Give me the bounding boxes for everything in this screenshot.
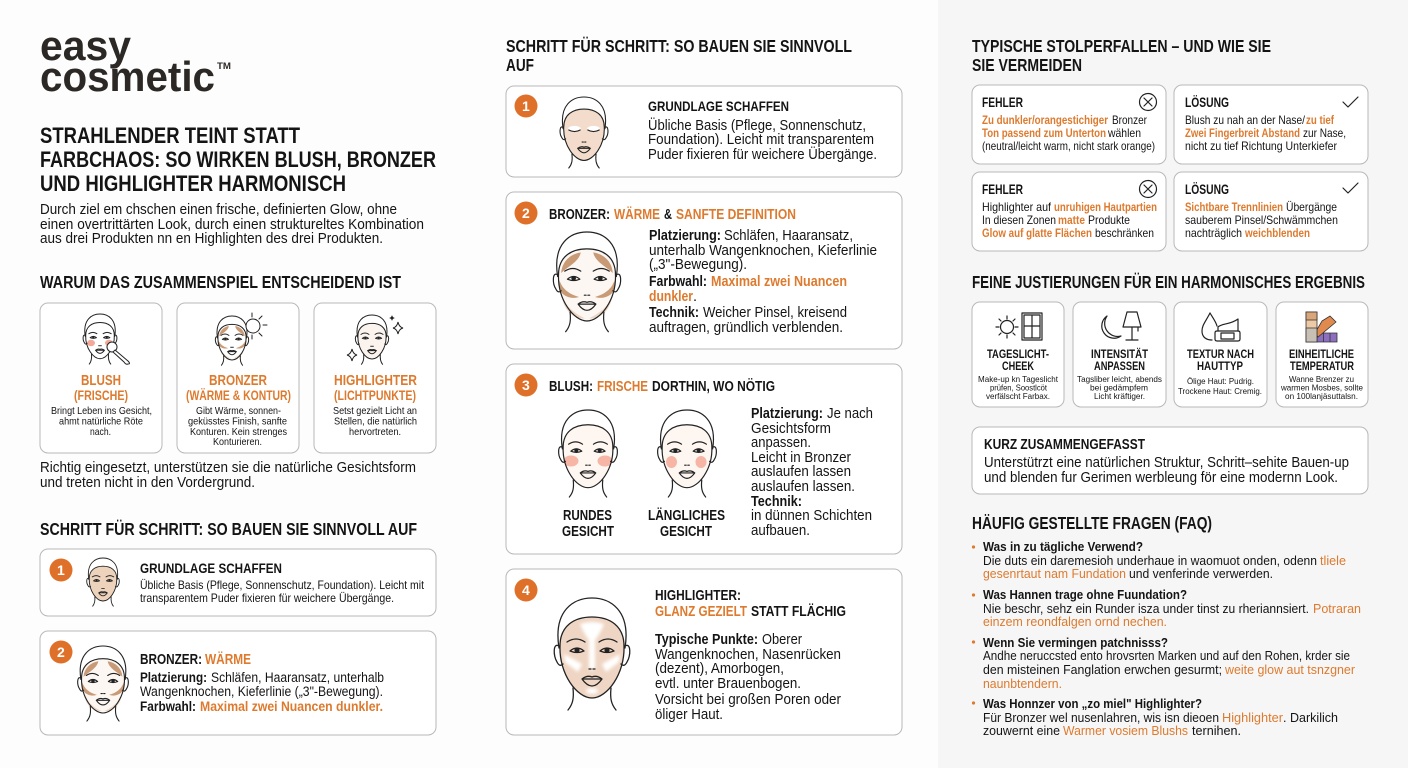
logo: TM <box>217 61 231 71</box>
number badge 3 <box>514 374 538 396</box>
panel: bronzer <box>177 303 299 453</box>
text: on 100lanjäsuttalsn. <box>1285 391 1358 401</box>
icon: face with sun <box>215 313 267 365</box>
icon: face with blush brush <box>83 314 130 364</box>
text: loesung 1: nicht zu tief Richtung Unterkiefer <box>1185 139 1337 153</box>
text: fehler 2: beschränken <box>1095 226 1154 240</box>
step text: Übliche Basis (Pflege, Sonnenschutz, Foundation). Leicht mit <box>140 578 425 592</box>
step text: . <box>693 289 697 305</box>
label: highlighter: (LICHTPUNKTE) <box>334 388 416 403</box>
label: ANPASSEN <box>1094 359 1145 373</box>
text: bei gedämpfem <box>1090 382 1148 392</box>
step heading: STATT FLÄCHIG <box>751 603 846 620</box>
number badge 1 <box>514 94 538 118</box>
text: Wanne Brenzer zu <box>1289 374 1354 384</box>
title: UND HIGHLIGHTER HARMONISCH <box>40 171 346 196</box>
text: bronzer description: Gibt Wärme, sonnen- <box>196 405 281 417</box>
label: blush: BLUSH <box>81 373 121 389</box>
step text: Farbwahl: <box>140 699 196 714</box>
step text: Farbwahl: <box>649 274 707 290</box>
faq item 3 <box>972 635 1356 691</box>
panel: middle step 2 <box>506 192 902 349</box>
label: bronzer <box>186 373 291 403</box>
step text <box>751 406 873 539</box>
label: highlighter <box>334 373 417 403</box>
icon: colour swatch fan <box>1306 312 1337 342</box>
label: bronzer: BRONZER <box>209 373 267 389</box>
step text <box>655 632 841 723</box>
heading: KURZ ZUSAMMENGEFASST <box>984 437 1145 453</box>
icon: drop and cream jar <box>1202 313 1240 341</box>
text: richtig eingesetzt: und treten nicht in den Vordergrund. <box>40 475 255 491</box>
text <box>1178 376 1262 396</box>
step text: Foundation). Leicht mit transparentem <box>648 132 874 148</box>
text: highlighter description: Setst gezielt Licht an <box>333 405 417 417</box>
text: warmen Mosbes, sollte <box>1280 382 1363 392</box>
step text: Platzierung: <box>140 670 207 685</box>
panel: middle step 1 <box>506 86 902 177</box>
faq item 4: Was Honnzer von „zo miel" Highlighter? <box>983 696 1202 711</box>
number badge 2 <box>50 640 72 664</box>
text: blush description <box>51 405 152 438</box>
step heading <box>140 651 251 668</box>
number badge 2: 2 <box>57 644 65 660</box>
panel: highlighter <box>314 303 436 453</box>
step text: unterhalb Wangenknochen, Kieferlinie <box>649 243 877 259</box>
text: bronzer description: geküsstes Finish, sanfte <box>188 416 287 428</box>
step text: auftragen, gründlich verblenden. <box>649 320 843 336</box>
step heading: SANFTE DEFINITION <box>676 207 796 223</box>
faq item 4: zouwernt eine <box>983 723 1060 738</box>
heading: schritt fuer schritt middle: AUF <box>506 55 534 75</box>
step text: Wangenknochen, Nasenrücken <box>655 647 841 663</box>
panel: middle step 3 <box>506 364 902 554</box>
step text: Technik: <box>649 305 699 321</box>
text: richtig eingesetzt <box>40 460 416 491</box>
text: highlighter description: hervortreten. <box>349 426 401 438</box>
number badge 4 <box>514 578 538 602</box>
text: Ölige Haut: Pudrig. <box>1187 376 1254 386</box>
step text <box>140 578 425 605</box>
text: loesung 1: zur Nase, <box>1303 126 1346 140</box>
panel: kurz zusammengefasst <box>972 427 1368 494</box>
step text <box>649 228 877 336</box>
icon: check mark <box>1343 97 1358 107</box>
panel: tageslicht <box>972 302 1064 407</box>
step text: Übliche Basis (Pflege, Sonnenschutz, <box>648 116 866 134</box>
heading: stolperfallen: SIE VERMEIDEN <box>972 55 1082 75</box>
step heading: FRISCHE <box>597 379 648 395</box>
number badge 1: 1 <box>522 98 530 114</box>
label: TEXTUR NACH <box>1187 347 1254 361</box>
label: blush: (FRISCHE) <box>74 388 128 403</box>
label: INTENSITÄT <box>1091 346 1149 361</box>
heading: schritt fuer schritt left: SCHRITT FÜR SCHRITT: SO BAUEN SIE SINNVOLL AUF <box>40 519 417 539</box>
panel: left step 1 <box>40 549 436 616</box>
icon: x in circle <box>1140 94 1156 110</box>
text: highlighter description: Stellen, die natürlich <box>334 416 417 428</box>
step text: dunkler <box>649 289 693 305</box>
label <box>1091 346 1149 373</box>
text: fehler 1: Bronzer <box>1112 113 1147 127</box>
text: loesung 2: Sichtbare Trennlinien <box>1185 200 1283 214</box>
step text: Puder fixieren für weichere Übergänge. <box>648 145 877 163</box>
text: loesung 2: sauberem Pinsel/Schwämmchen <box>1185 213 1338 227</box>
text: loesung 2 <box>1185 200 1338 240</box>
logo: cosmetic <box>40 53 215 100</box>
faq item 3: den misteinen Fanglation erwchen gesurmt; <box>983 662 1222 677</box>
text <box>978 374 1059 401</box>
number badge 1 <box>50 558 72 582</box>
step text: (dezent), Amorbogen, <box>655 661 784 677</box>
panel: intensitaet <box>1073 302 1166 407</box>
step heading <box>655 587 846 620</box>
label: blush <box>74 373 128 403</box>
faq item 1 <box>972 539 1346 581</box>
panel: middle step 4 <box>506 569 902 735</box>
faq item 1: tliele <box>1320 553 1346 568</box>
text: bronzer description <box>188 405 287 448</box>
step text <box>648 116 877 163</box>
intro text: einen overtrittärten Look, durch einen struktureltes Kombination <box>40 217 424 233</box>
text: verfälscht Farbax. <box>986 391 1050 401</box>
step text: Technik: <box>751 494 802 510</box>
panel: textur <box>1174 302 1267 407</box>
label: loesung: LÖSUNG <box>1185 94 1229 110</box>
label: rundes gesicht: RUNDES <box>563 508 612 524</box>
label: laengliches gesicht: LÄNGLICHES <box>648 507 725 524</box>
faq item 3: Wenn Sie vermingen patchnisss? <box>983 635 1168 650</box>
icon: face closed eyes <box>560 97 608 168</box>
step heading: & <box>664 207 672 223</box>
text: bronzer description: Konturieren. <box>213 436 262 448</box>
text <box>1280 374 1363 401</box>
title: FARBCHAOS: SO WIRKEN BLUSH, BRONZER <box>40 147 436 172</box>
text: loesung 1: Zwei Fingerbreit Abstand <box>1185 126 1300 140</box>
intro text <box>40 202 424 247</box>
step heading: GLANZ GEZIELT <box>655 603 747 620</box>
step text: Platzierung: <box>649 228 721 244</box>
step text: öliger Haut. <box>655 707 723 723</box>
faq item 1: Die duts ein daremesioh underhaue in waomuot onden, odenn <box>983 553 1317 568</box>
heading: stolperfallen <box>972 36 1271 75</box>
logo: easy <box>40 22 132 69</box>
text: fehler 1: (neutral/leicht warm, nicht stark orange) <box>982 139 1155 153</box>
step text: Maximal zwei Nuancen dunkler. <box>200 699 383 714</box>
step text: aufbauen. <box>751 523 810 539</box>
heading: stolperfallen: TYPISCHE STOLPERFALLEN – UND WIE SIE <box>972 36 1271 56</box>
label <box>1187 347 1254 373</box>
faq item 1: Was in zu tägliche Verwend? <box>983 539 1143 554</box>
step text: Typische Punkte: <box>655 632 758 648</box>
text: blush description: ahmt natürliche Röte <box>59 416 143 428</box>
label: laengliches gesicht <box>648 507 725 540</box>
step heading: BLUSH: <box>549 379 593 395</box>
title <box>40 123 436 196</box>
label: rundes gesicht <box>562 508 614 540</box>
heading: faq: HÄUFIG GESTELLTE FRAGEN (FAQ) <box>972 513 1212 533</box>
icon: moon and lamp <box>1102 312 1141 340</box>
faq item 1: gesenrtaut nam Fundation <box>983 566 1126 581</box>
text <box>984 455 1349 486</box>
faq item 2: einzem reondfalgen ornd nechen. <box>983 614 1167 629</box>
text: fehler 1 <box>982 113 1155 153</box>
label: HAUTTYP <box>1197 359 1243 373</box>
faq item 4 <box>972 696 1338 738</box>
step text: Maximal zwei Nuancen <box>711 274 847 290</box>
icon: round face with blush <box>559 410 617 497</box>
heading: schritt fuer schritt middle: SCHRITT FÜR SCHRITT: SO BAUEN SIE SINNVOLL <box>506 36 852 56</box>
intro text: Durch ziel em chschen einen frische, definierten Glow, ohne <box>40 202 397 218</box>
text: loesung 1: zu tief <box>1306 113 1334 127</box>
text: loesung 2: nachträglich <box>1185 226 1242 240</box>
text: fehler 1: wählen <box>1107 126 1141 140</box>
panel: fehler 1 <box>972 85 1166 164</box>
icon: face with highlighter zones <box>554 598 630 710</box>
label: rundes gesicht: GESICHT <box>562 524 614 540</box>
faq item 3: naunbtendern. <box>983 676 1062 691</box>
text: highlighter description <box>333 405 417 438</box>
panel: blush <box>40 303 162 453</box>
step text: Platzierung: <box>751 406 823 422</box>
label: fehler: FEHLER <box>982 181 1023 197</box>
faq item 2: Was Hannen trage ohne Fuundation? <box>983 587 1187 602</box>
faq item 3: Andhe neruccsted ento hrovsrten Marken und auf den Rohen, krder sie <box>983 648 1350 663</box>
text: richtig eingesetzt: Richtig eingesetzt, unterstützen sie die natürliche Gesichtsform <box>40 460 416 476</box>
title: STRAHLENDER TEINT STATT <box>40 123 300 148</box>
text: loesung 2: weichblenden <box>1244 226 1310 240</box>
text: fehler 2 <box>982 200 1157 240</box>
text: fehler 2: matte <box>1058 213 1085 227</box>
text: Licht kräftiger. <box>1094 391 1145 401</box>
panel: fehler 2 <box>972 172 1166 251</box>
panel: temperatur <box>1276 302 1368 407</box>
step text: Vorsicht bei großen Poren oder <box>655 692 841 708</box>
step text: („3"-Bewegung). <box>649 257 747 273</box>
step heading: BRONZER: <box>549 207 610 223</box>
label: TEMPERATUR <box>1290 359 1354 373</box>
step text: Gesichtsform <box>751 421 831 437</box>
intro text: aus drei Produkten nn en Highlighten des drei Produkten. <box>40 231 383 247</box>
text: blush description: nach. <box>90 426 111 438</box>
text: fehler 2: Produkte <box>1088 213 1130 227</box>
step text <box>140 670 384 714</box>
number badge 3: 3 <box>522 377 530 393</box>
step heading: BRONZER: <box>140 652 202 668</box>
faq item 1: und venferinde verwerden. <box>1129 566 1273 581</box>
step text: Wangenknochen, Kieferlinie („3"-Bewegung). <box>140 684 383 699</box>
text: bronzer description: Konturen. Kein strenges <box>190 426 287 438</box>
step heading: WÄRME <box>205 651 251 668</box>
icon: face with foundation <box>87 558 119 606</box>
icon: check mark <box>1343 183 1358 193</box>
faq item 4: Warmer vosiem Blushs <box>1063 723 1188 738</box>
step text: in dünnen Schichten <box>751 508 872 524</box>
panel: left step 2 <box>40 631 436 735</box>
icon: x in circle <box>1140 180 1156 198</box>
faq item 2 <box>972 587 1361 629</box>
step heading: GRUNDLAGE SCHAFFEN <box>140 560 282 576</box>
step text: Schläfen, Haaransatz, <box>724 228 853 244</box>
faq item 2: Nie beschr, sehz ein Runder isza under tinst zu rheriannsiert. <box>983 601 1309 616</box>
step text: Leicht in Bronzer <box>751 450 851 466</box>
icon: face with bronzer contour <box>553 232 621 332</box>
number badge 2: 2 <box>522 205 530 221</box>
text: Trockene Haut: Cremig. <box>1178 386 1262 396</box>
number badge 4: 4 <box>522 582 530 598</box>
step text: Schläfen, Haaransatz, unterhalb <box>211 670 384 685</box>
panel: loesung 1 <box>1174 85 1368 164</box>
label: bronzer: (WÄRME & KONTUR) <box>186 388 291 403</box>
label: TAGESLICHT- <box>987 347 1049 361</box>
number badge 1: 1 <box>57 562 65 578</box>
step heading <box>549 206 796 223</box>
text: fehler 1: Zu dunkler/orangestichiger <box>982 113 1108 127</box>
step text: auslaufen lassen <box>751 464 851 480</box>
faq item 3: weite glow aut tsnzgner <box>1224 662 1356 677</box>
text: und blenden fur Gerimen werbleung för eine modernn Look. <box>984 470 1338 486</box>
faq item 4: Für Bronzer wel nusenlahren, wis isn dieoen <box>983 710 1219 725</box>
step text: auslaufen lassen. <box>751 479 855 495</box>
step text: Oberer <box>762 632 802 648</box>
text: fehler 2: Highlighter auf <box>982 200 1052 214</box>
text: fehler 2: unruhigen Hautpartien <box>1054 200 1157 214</box>
icon: sun and window <box>996 313 1042 340</box>
text: fehler 1: Ton passend zum Unterton <box>982 126 1106 140</box>
text: blush description: Bringt Leben ins Gesicht, <box>51 405 152 417</box>
label: laengliches gesicht: GESICHT <box>660 524 712 540</box>
text: Unterstütrzt eine natürlichen Struktur, Schritt–sehite Bauen-up <box>984 455 1349 471</box>
text: loesung 1 <box>1185 113 1346 153</box>
panel: loesung 2 <box>1174 172 1368 251</box>
icon: face with sparkles <box>347 315 403 364</box>
label: EINHEITLICHE <box>1289 347 1354 361</box>
logo <box>40 22 231 100</box>
text: fehler 2: In diesen Zonen <box>982 213 1056 227</box>
icon: long face with blush <box>658 410 716 497</box>
step heading: HIGHLIGHTER: <box>655 587 741 604</box>
step heading: DORTHIN, WO NÖTIG <box>652 378 775 395</box>
faq item 2: Potraran <box>1313 601 1361 616</box>
heading: warum das zusammenspiel: WARUM DAS ZUSAMMENSPIEL ENTSCHEIDEND IST <box>40 272 401 292</box>
step text: Je nach <box>827 406 873 422</box>
text: Make-up kn Tageslicht <box>978 374 1059 384</box>
label: CHEEK <box>1002 359 1034 373</box>
step heading: WÄRME <box>614 206 660 223</box>
text: fehler 2: Glow auf glatte Flächen <box>982 226 1092 240</box>
text <box>1077 374 1162 401</box>
icon: face with bronzer zones <box>78 646 128 721</box>
label <box>1289 347 1354 373</box>
text: loesung 1: Blush zu nah an der Nase/ <box>1185 113 1306 127</box>
step text: Weicher Pinsel, kreisend <box>703 305 847 321</box>
text: loesung 2: Übergänge <box>1286 200 1337 214</box>
faq item 4: . Darkilich <box>1283 710 1338 725</box>
label <box>987 347 1049 373</box>
step heading <box>549 378 775 395</box>
step heading: GRUNDLAGE SCHAFFEN <box>648 98 789 114</box>
faq item 4: Highlighter <box>1222 710 1284 725</box>
step text: transparentem Puder fixieren für weichere Übergänge. <box>140 591 394 605</box>
heading: schritt fuer schritt middle <box>506 36 852 75</box>
faq item 4: ternihen. <box>1192 723 1241 738</box>
label: fehler: FEHLER <box>982 94 1023 110</box>
text: Tagsliber leicht, abends <box>1077 374 1162 384</box>
step text: anpassen. <box>751 435 811 451</box>
number badge 2 <box>514 202 538 224</box>
step text: evtl. unter Brauenbogen. <box>655 676 801 692</box>
text: prüfen, Soostlcöt <box>990 382 1048 392</box>
label: loesung: LÖSUNG <box>1185 181 1229 197</box>
label: highlighter: HIGHLIGHTER <box>334 373 417 389</box>
